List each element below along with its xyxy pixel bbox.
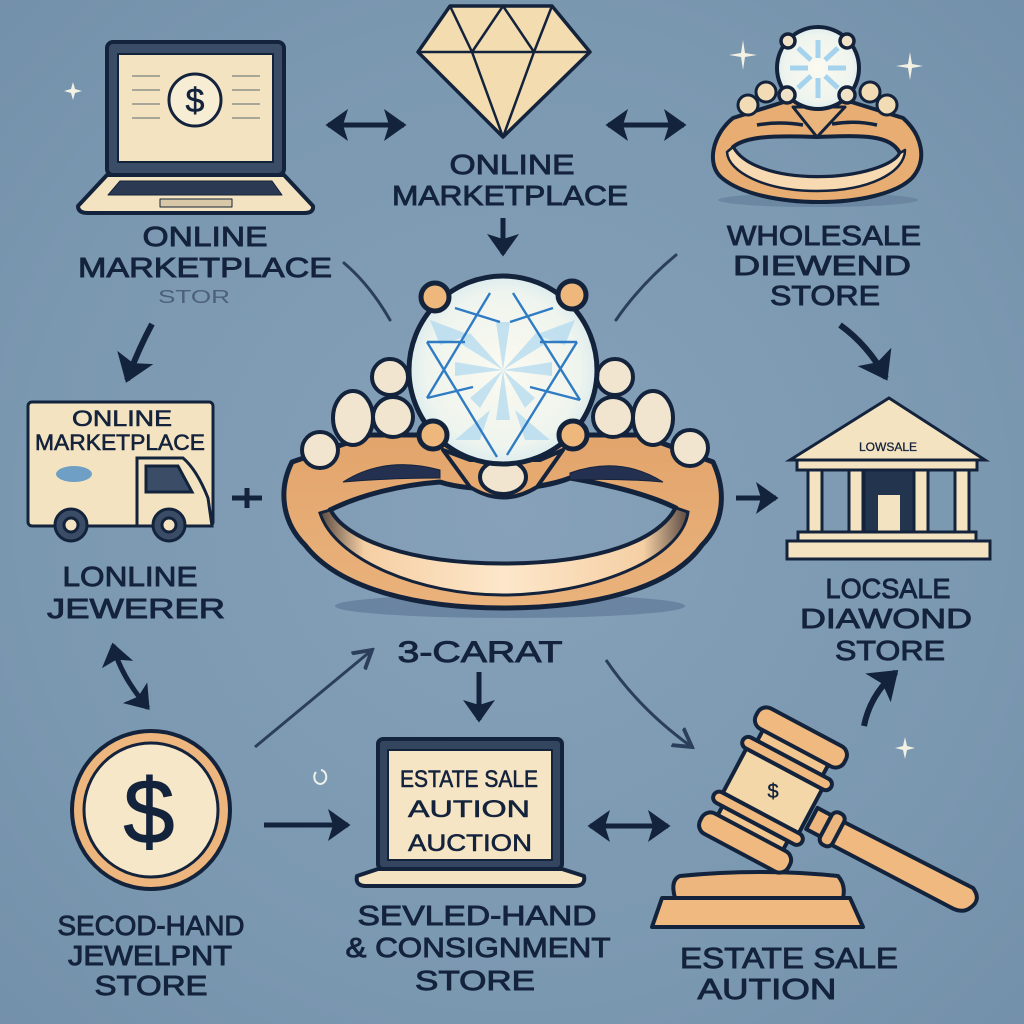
icon: delivery van: ONLINE	[72, 406, 172, 431]
arrow: store to van	[127, 324, 152, 380]
heading: online marketplace top: ONLINE	[450, 149, 574, 180]
top ring: facets	[790, 40, 846, 98]
heading: second-hand jewelry store: JEWELPNT	[68, 940, 232, 971]
main ring: band	[284, 435, 721, 608]
icon: laptop with dollar: $	[186, 82, 205, 120]
main ring: center diamond	[409, 276, 597, 464]
main ring: diamond blue lines	[427, 293, 580, 457]
arrow: coin to center	[255, 650, 372, 747]
arrow: down to main ring	[500, 218, 506, 254]
arrow: down to laptop	[476, 672, 482, 720]
gavel: handle	[826, 820, 977, 911]
heading: wholesale diamond store: DIEWEND	[733, 250, 911, 281]
top ring: gem	[777, 27, 859, 109]
heading: estate sale auction: ESTATE SALE	[680, 943, 898, 975]
icon: sparkles top right	[729, 40, 923, 80]
main ring: side stones	[302, 359, 708, 468]
main ring: prongs	[419, 281, 587, 449]
heading: wholesale diamond store	[727, 220, 921, 311]
gavel: collar	[803, 803, 847, 848]
icon: sparkle near gavel	[895, 737, 915, 759]
top ring: stones	[738, 82, 897, 115]
arrows: curved connectors to main ring	[344, 255, 676, 320]
main ring: bottom stone	[480, 460, 526, 494]
icon: auction laptop: ESTATE SALE	[400, 766, 538, 793]
icon: laptop with dollar	[78, 42, 313, 213]
heading: wholesale diamond store: WHOLESALE	[727, 220, 921, 251]
heading: online marketplace store: MARKETPLACE	[78, 252, 332, 283]
icon: auction laptop: AUCTION	[408, 830, 532, 857]
top ring: inner band	[727, 147, 905, 191]
arrow: center to gavel	[606, 660, 692, 747]
icon: delivery van: MARKETPLACE	[35, 430, 205, 455]
gavel: base	[673, 872, 844, 898]
heading: consignment store: & CONSIGNMENT	[346, 932, 610, 963]
heading: second-hand jewelry store: STORE	[94, 970, 208, 1001]
arrow: wholesale to bank	[840, 325, 886, 378]
top ring: prongs	[779, 34, 855, 103]
icon: dollar coin	[72, 731, 230, 889]
heading: online jeweler	[47, 561, 225, 624]
top ring: band	[713, 100, 921, 202]
top ring: shoulder slits	[757, 122, 877, 125]
arrow: gavel to store	[864, 672, 896, 726]
main ring: setting cutouts	[343, 465, 663, 482]
icon: top diamond	[418, 6, 590, 137]
icon: auction laptop: AUTION	[408, 796, 530, 823]
heading: online marketplace store: STOR	[158, 287, 230, 307]
icon: gavel: $	[767, 781, 779, 803]
heading: estate sale auction	[680, 943, 898, 1006]
main ring: inner band	[320, 508, 688, 595]
heading: local diamond store	[800, 573, 972, 666]
arrow: ring to bank	[736, 496, 776, 500]
heading: online marketplace store: ONLINE	[142, 221, 268, 252]
icon: top right ring	[713, 27, 921, 207]
icon: auction laptop	[357, 739, 584, 886]
icon: sparkle	[64, 82, 82, 100]
heading: online marketplace top	[392, 149, 628, 211]
heading: online marketplace store	[78, 221, 332, 307]
arrow: van to ring	[232, 488, 262, 508]
main ring: prong legs and basket	[443, 450, 563, 498]
heading: second-hand jewelry store	[58, 910, 244, 1001]
arrow: laptop to diamond	[328, 122, 404, 128]
heading: local diamond store: STORE	[835, 635, 945, 666]
main ring: diamond soft facets	[430, 320, 575, 440]
arrow: coin to laptop	[264, 822, 348, 828]
heading: second-hand jewelry store: SECOD-HAND	[58, 910, 244, 941]
icon: bank building: LOWSALE	[859, 440, 917, 454]
heading: online marketplace top: MARKETPLACE	[392, 180, 628, 211]
arrow: laptop to gavel	[590, 824, 668, 828]
heading: consignment store: SEVLED-HAND	[358, 900, 596, 931]
arrow: double vertical left	[113, 645, 148, 708]
heading: local diamond store: DIAWOND	[800, 603, 972, 634]
icon: small ring mark	[314, 770, 326, 784]
heading: online jeweler: JEWERER	[47, 593, 225, 624]
main ring	[284, 276, 721, 618]
heading: local diamond store: LOCSALE	[826, 573, 950, 604]
heading: estate sale auction: AUTION	[698, 974, 836, 1006]
heading: online jeweler: LONLINE	[62, 561, 198, 592]
heading: wholesale diamond store: STORE	[770, 280, 880, 311]
icon: bank building	[787, 398, 990, 559]
heading: 3-carat: 3-CARAT	[398, 636, 562, 669]
heading: consignment store	[346, 900, 610, 996]
gavel: head	[696, 704, 850, 876]
main ring: shadow	[335, 594, 685, 618]
heading: consignment store: STORE	[415, 965, 535, 996]
top ring: setting point	[793, 107, 845, 137]
arrow: diamond to ring	[608, 122, 684, 128]
top ring: shadow	[718, 193, 918, 207]
icon: dollar coin: $	[123, 761, 175, 863]
icon: gavel	[652, 704, 977, 927]
icon: delivery van	[28, 402, 213, 541]
